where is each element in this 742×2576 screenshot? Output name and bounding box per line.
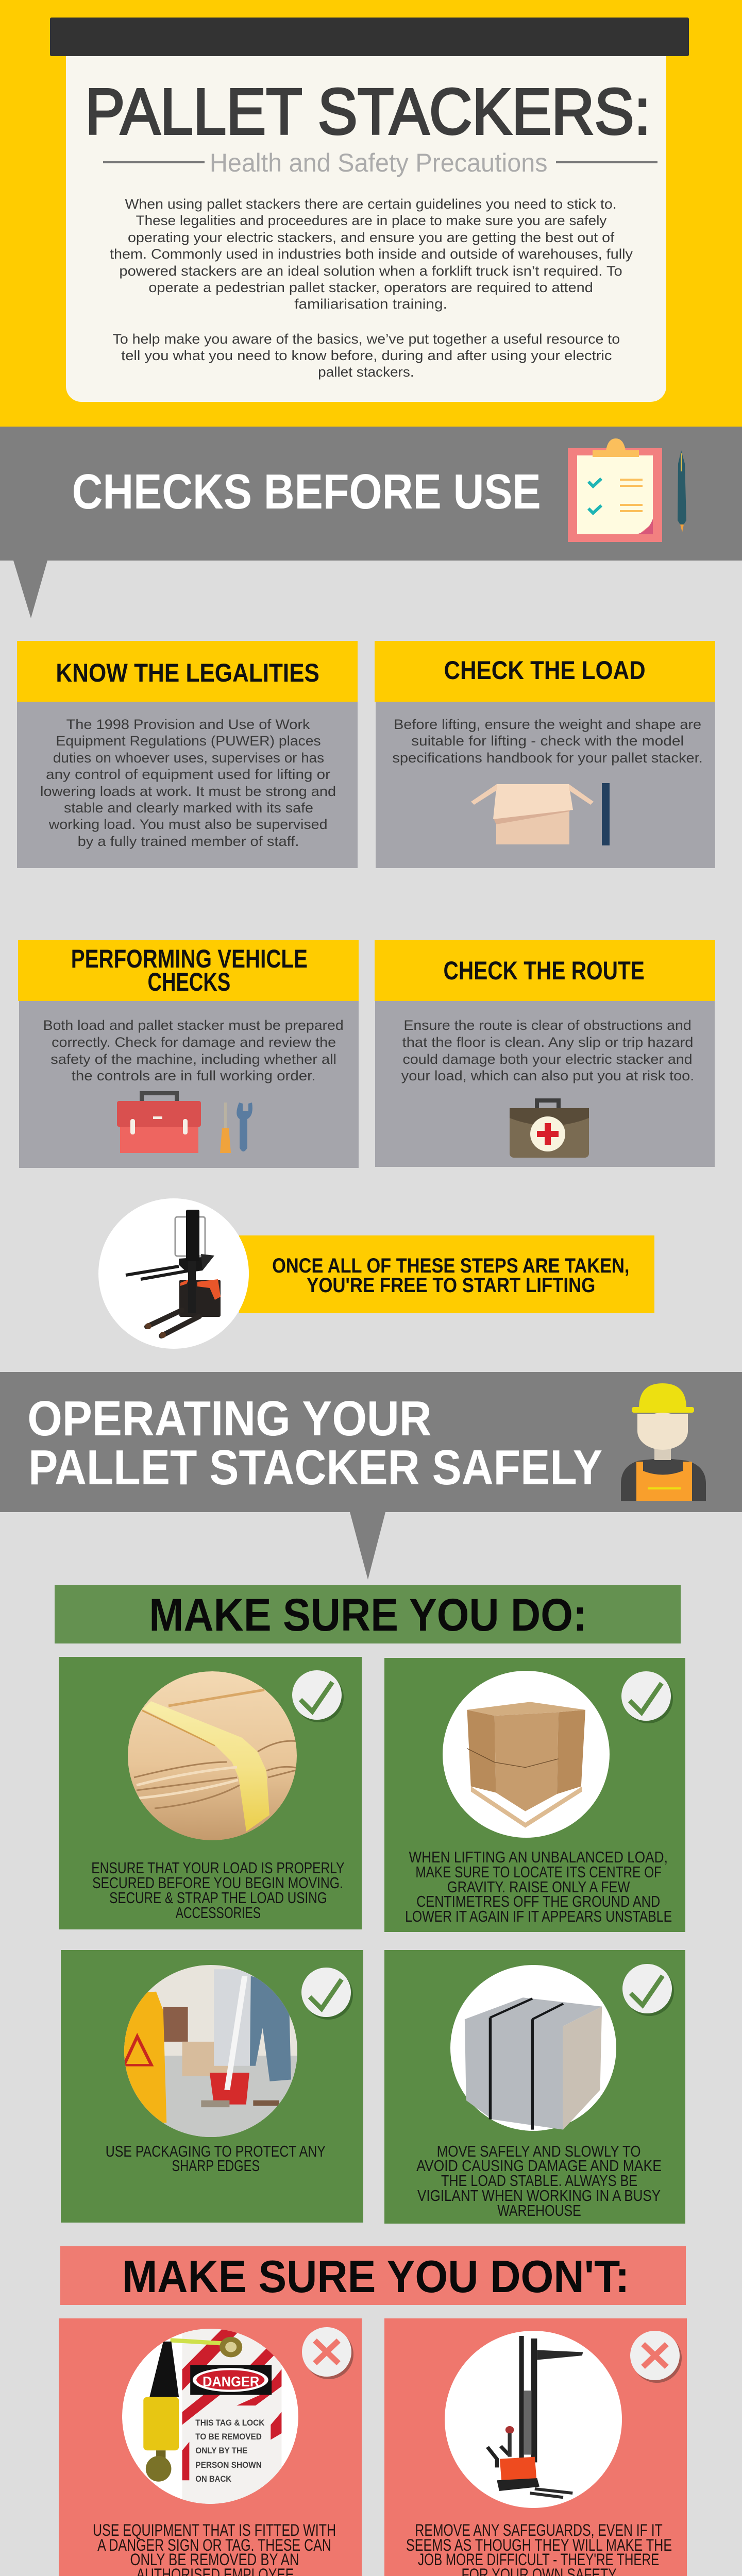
callout text: YOU'RE FREE TO START LIFTING [307,1274,595,1297]
heading: CHECK THE LOAD [444,656,646,685]
badge: cross [302,2327,353,2379]
intro text: tell you what you need to know before, during and after using your electric [121,348,612,363]
caption: SHARP EDGES [172,2157,260,2175]
body text: correctly. Check for damage and review the [52,1035,336,1050]
caption [406,2521,672,2576]
body text: suitable for lifting - check with the model [411,734,684,749]
heading: KNOW THE LEGALITIES [56,659,319,687]
caption: LOWER IT AGAIN IF IT APPEARS UNSTABLE [405,1908,672,1925]
body text: Both load and pallet stacker must be prepared [43,1018,344,1033]
caption: ONLY BE REMOVED BY AN [130,2550,299,2569]
panel: do - secure load [59,1657,362,1929]
icon: worker with hard hat [621,1383,706,1501]
body text [40,717,336,849]
body text: Equipment Regulations (PUWER) places [56,734,321,749]
section heading: make sure you don't: MAKE SURE YOU DON'T: [122,2251,629,2302]
photo: boxes on pallet [443,1671,610,1838]
subtitle: Health and Safety Precautions [210,149,548,177]
subtitle [103,149,657,177]
caption: SEEMS AS THOUGH THEY WILL MAKE THE [406,2536,672,2554]
icon: first aid bag [510,1100,589,1158]
caption: USE PACKAGING TO PROTECT ANY [106,2143,326,2160]
intro text: When using pallet stackers there are certain guidelines you need to stick to. [125,197,617,212]
badge: check [292,1670,344,1722]
paper sheet [66,56,666,402]
intro text: operate a pedestrian pallet stacker, operators are required to attend [148,280,593,295]
caption: A DANGER SIGN OR TAG. THESE CAN [97,2536,331,2554]
body text: working load. You must also be supervised [48,817,328,832]
icon: open box and ruler [471,783,610,845]
caption: WHEN LIFTING AN UNBALANCED LOAD, [409,1849,668,1866]
caption: AVOID CAUSING DAMAGE AND MAKE [416,2157,662,2175]
badge: check [622,1964,674,2016]
body text: by a fully trained member of staff. [78,834,299,849]
intro text: powered stackers are an ideal solution when a forklift truck isn’t required. To [119,264,622,279]
intro text [110,197,633,380]
panel: know the legalities [17,641,358,868]
heading: OPERATING YOUR [27,1391,432,1446]
heading: CHECK THE ROUTE [444,957,645,985]
icon: toolbox and tools [117,1093,252,1153]
body text: any control of equipment used for lifting or [46,767,330,782]
caption: MOVE SAFELY AND SLOWLY TO [437,2143,641,2160]
panel: do - packaging [61,1950,363,2223]
photo circle: pallet stacker [98,1198,249,1349]
caption [416,2143,662,2219]
banner: checks before use [0,427,742,618]
badge: check [621,1671,673,1723]
panel: check the load [375,641,715,868]
intro text: operating your electric stackers, and ensure you are getting the best out of [128,230,615,245]
heading: PERFORMING VEHICLE [71,945,308,973]
panel: performing vehicle checks [18,940,359,1168]
caption [405,1849,672,1925]
caption: CENTIMETRES OFF THE GROUND AND [416,1893,660,1910]
icon: clipboard and pen [568,438,686,542]
caption: GRAVITY. RAISE ONLY A FEW [447,1878,630,1896]
caption: JOB MORE DIFFICULT - THEY'RE THERE [418,2550,659,2569]
caption: THE LOAD STABLE. ALWAYS BE [441,2172,637,2190]
heading: PALLET STACKER SAFELY [28,1440,602,1495]
heading: CHECKS BEFORE USE [72,464,541,519]
body text: specifications handbook for your pallet stacker. [392,751,703,766]
banner: operating your pallet stacker safely [0,1372,742,1580]
callout text [272,1255,629,1297]
photo: danger lock tag: PERSON SHOWN [195,2460,262,2470]
photo: danger lock tag: ON BACK [195,2474,231,2484]
panel: do - move safely [384,1950,685,2224]
photo: tall stacker [445,2331,622,2508]
badge: check [301,1968,353,2020]
heading [27,1391,602,1495]
caption [93,2521,336,2576]
body text [43,1018,344,1083]
photo: wrapped pallet load [450,1965,616,2131]
panel: don't - danger tag [59,2318,362,2576]
caption: MAKE SURE TO LOCATE ITS CENTRE OF [415,1863,662,1881]
section heading: make sure you do [55,1585,681,1643]
intro text: pallet stackers. [318,365,414,380]
caption: SECURE & STRAP THE LOAD USING [109,1889,327,1907]
caption: ACCESSORIES [176,1904,261,1922]
body text: that the floor is clean. Any slip or trip hazard [402,1035,693,1050]
panel: don't - remove safeguards [384,2318,687,2576]
caption: REMOVE ANY SAFEGUARDS, EVEN IF IT [415,2521,663,2539]
body text: safety of the machine, including whether all [50,1052,336,1067]
title: PALLET STACKERS: [85,75,651,148]
heading: CHECKS [148,968,230,996]
body text: Before lifting, ensure the weight and shape are [394,717,701,732]
caption: SECURED BEFORE YOU BEGIN MOVING. [92,1874,343,1892]
body text: lowering loads at work. It must be strong and [40,784,336,799]
intro text: To help make you aware of the basics, we’ve put together a useful resource to [113,332,620,347]
dark roller bar [50,18,689,56]
body text [392,717,703,766]
photo: danger lock tag: TO BE REMOVED [195,2432,262,2442]
body text [401,1018,694,1083]
body text: your load, which can also put you at risk too. [401,1069,694,1083]
body text: the controls are in full working order. [72,1069,316,1083]
body text: could damage both your electric stacker and [403,1052,693,1067]
photo: strapped cardboard load [128,1671,298,1840]
panel: check the route [375,940,715,1167]
photo: cleaning floor [124,1963,299,2141]
panel: do - unbalanced load [384,1658,685,1932]
panel: header [0,0,742,427]
caption: ENSURE THAT YOUR LOAD IS PROPERLY [91,1859,345,1877]
caption: USE EQUIPMENT THAT IS FITTED WITH [93,2521,336,2539]
body text: duties on whoever uses, supervises or has [53,751,324,766]
photo: danger lock tag: THIS TAG & LOCK [195,2418,265,2428]
caption [106,2143,326,2175]
caption: VIGILANT WHEN WORKING IN A BUSY [417,2187,661,2205]
body text: stable and clearly marked with its safe [64,801,313,816]
photo: danger lock tag [122,2329,298,2508]
section heading: make sure you don't [60,2246,686,2305]
callout text: ONCE ALL OF THESE STEPS ARE TAKEN, [272,1255,629,1277]
badge: cross [630,2331,682,2383]
intro text: them. Commonly used in industries both inside and outside of warehouses, fully [110,247,633,262]
section heading: make sure you do: MAKE SURE YOU DO: [149,1590,587,1641]
heading [71,945,308,996]
body text: The 1998 Provision and Use of Work [66,717,310,732]
intro text: These legalities and proceedures are in place to make sure you are safely [136,213,606,228]
intro text: familiarisation training. [294,297,447,312]
body text: Ensure the route is clear of obstructions and [403,1018,692,1033]
photo: danger lock tag: DANGER [203,2374,259,2389]
photo: danger lock tag: ONLY BY THE [195,2446,247,2455]
callout: once all steps are taken [98,1198,654,1349]
caption [91,1859,345,1922]
caption: WAREHOUSE [497,2202,581,2219]
